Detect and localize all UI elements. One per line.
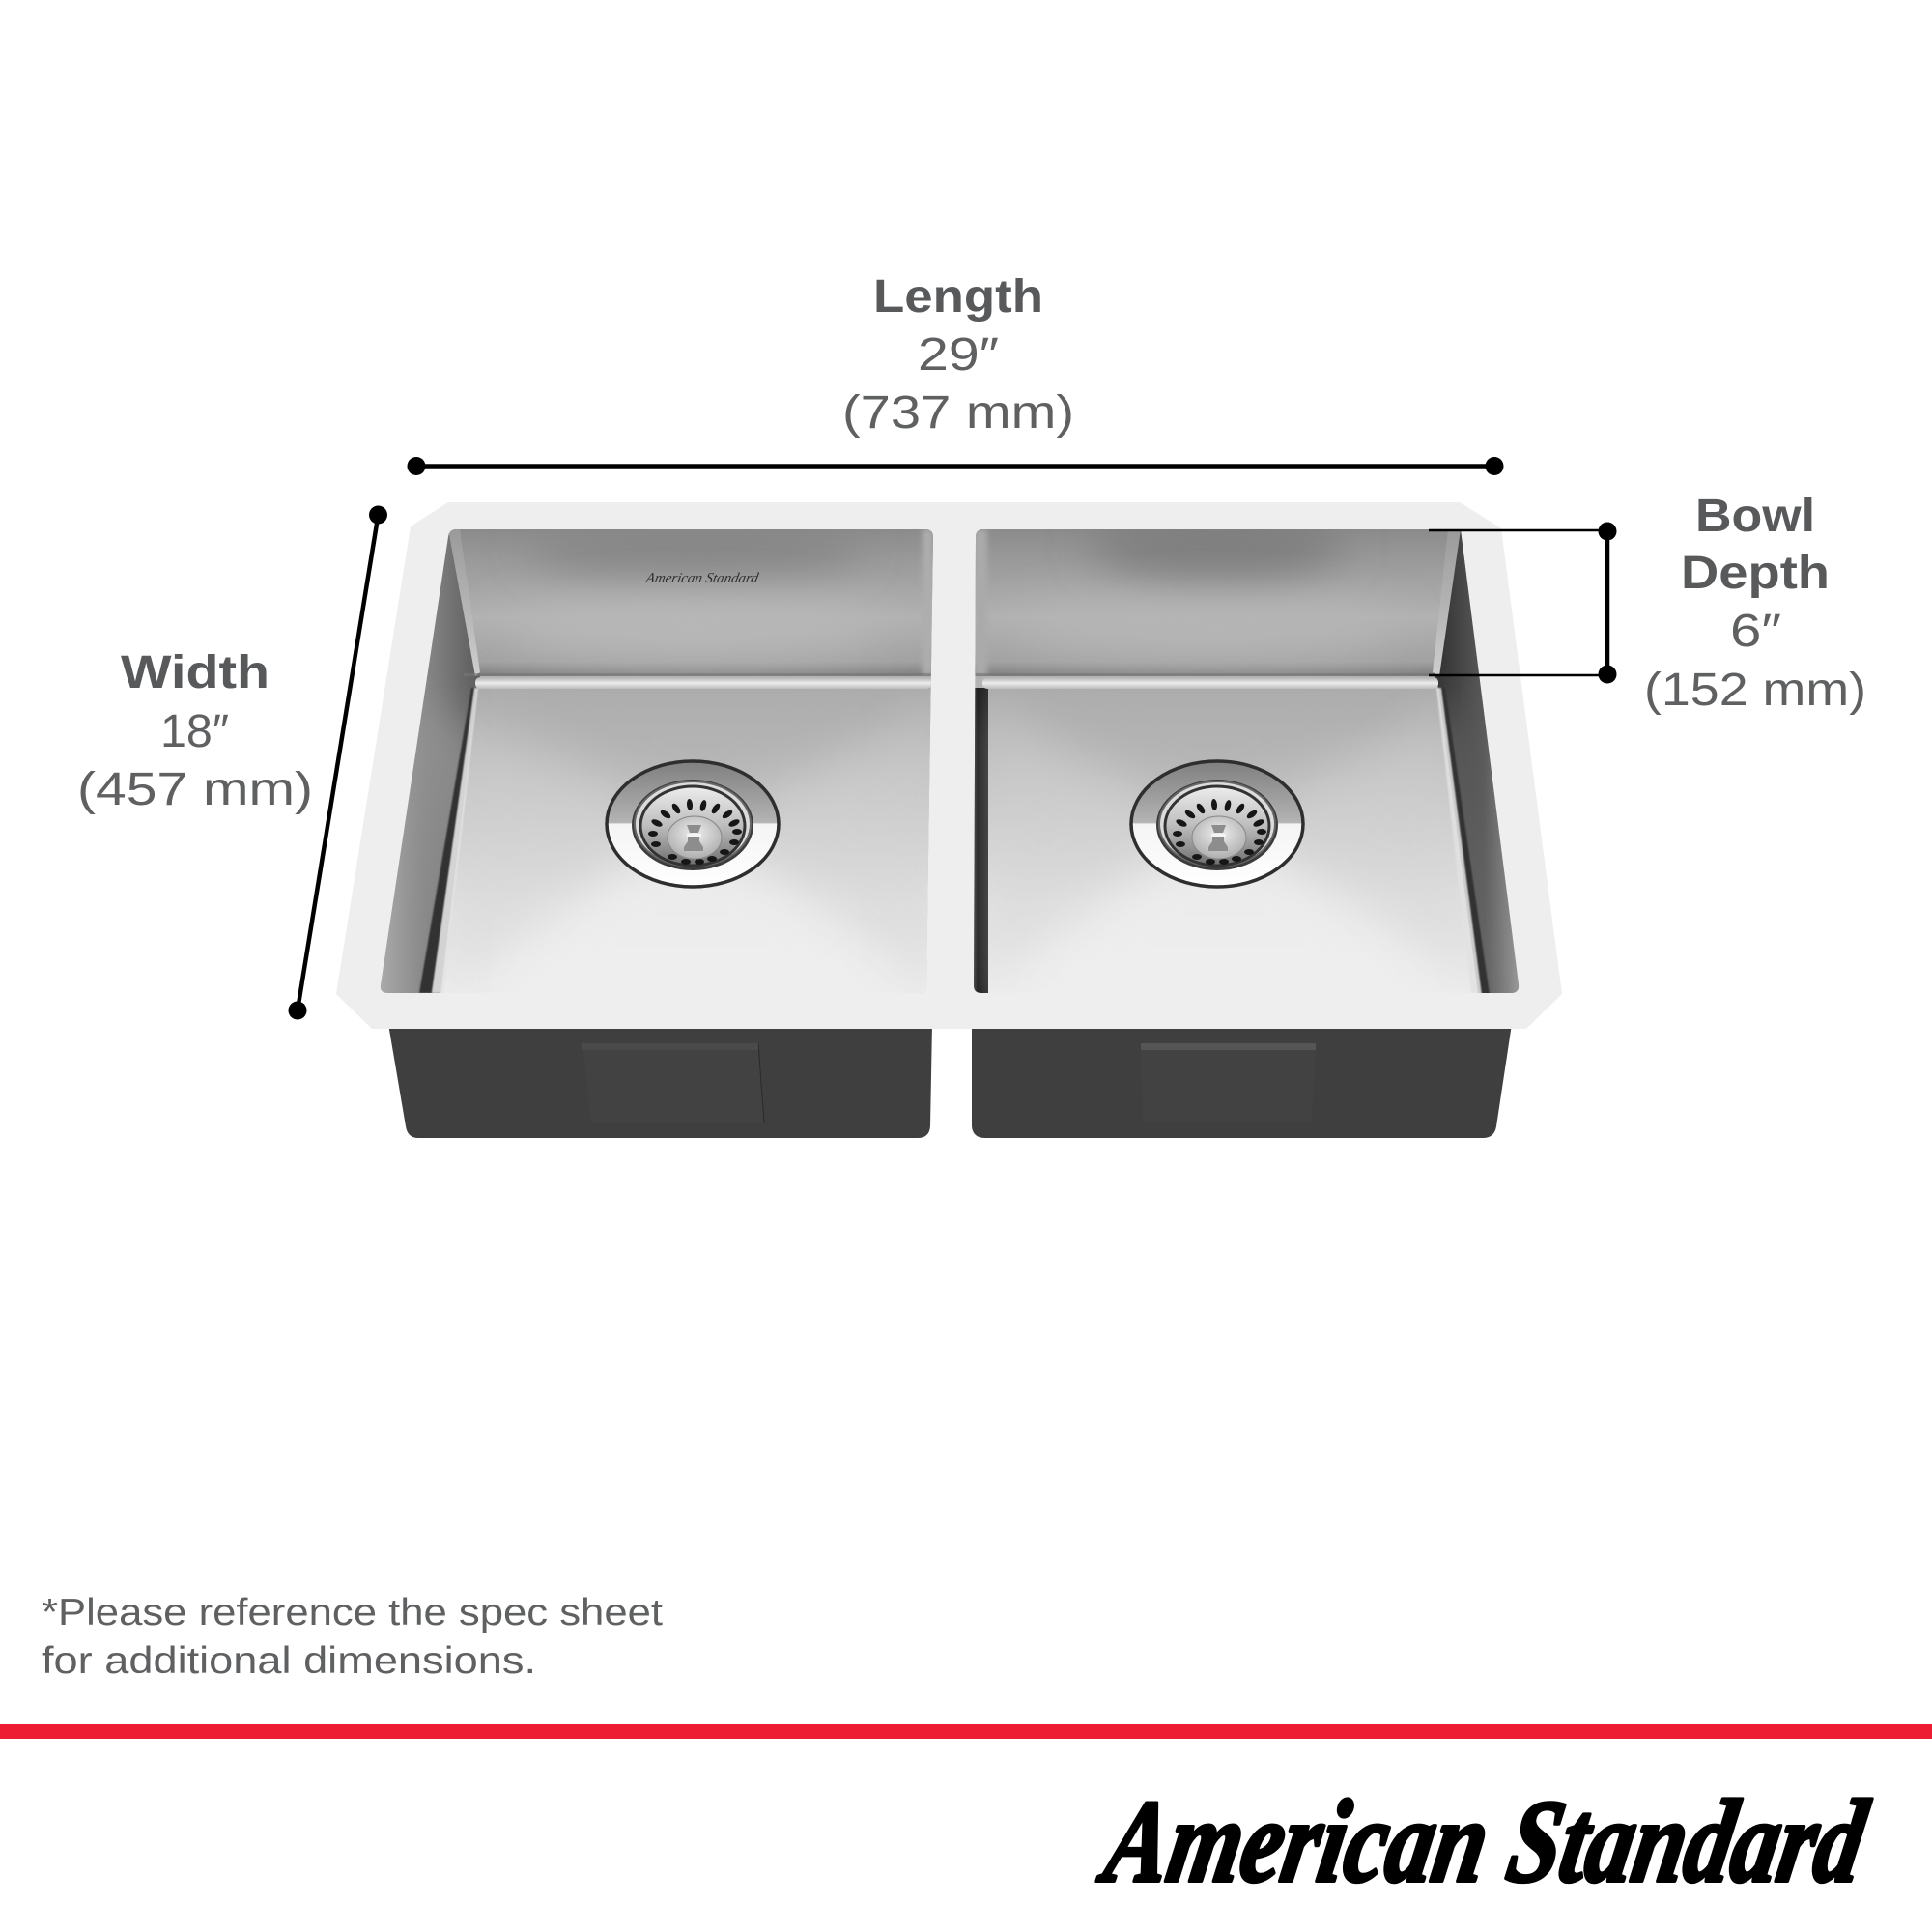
width label: (457 mm)	[77, 764, 313, 815]
left basin underside	[388, 1024, 932, 1138]
right basin underside	[972, 1024, 1512, 1138]
right basin label plate	[1141, 1043, 1316, 1122]
bowl depth label: 6″	[1730, 606, 1781, 657]
back wall	[974, 529, 1466, 676]
length label: (737 mm)	[842, 387, 1074, 439]
floor bevel strip	[1440, 688, 1490, 995]
left wall	[372, 529, 480, 993]
bowl depth dimension line	[1429, 522, 1617, 684]
left drain	[607, 761, 779, 887]
footnote: for additional dimensions.	[42, 1640, 536, 1682]
right wall corner seam	[1433, 529, 1461, 676]
sink rim	[336, 502, 1562, 1029]
right drain	[1131, 761, 1303, 887]
floor	[988, 748, 1472, 993]
length dimension line	[408, 457, 1503, 475]
front lip highlight	[982, 677, 1438, 689]
width label	[77, 647, 313, 815]
footnote	[42, 1592, 663, 1682]
width label: Width	[121, 647, 270, 698]
right bowl	[974, 529, 1519, 993]
length label: 29″	[918, 329, 999, 381]
floor bevel strip	[419, 688, 475, 993]
red divider bar	[0, 1724, 1932, 1739]
left bevel shadow	[974, 688, 988, 993]
sink illustration	[336, 497, 1562, 1138]
bowl depth label	[1644, 491, 1866, 716]
bowl depth label: (152 mm)	[1644, 665, 1866, 716]
engraved logo: American Standard	[643, 570, 760, 586]
left bowl	[372, 512, 942, 1005]
width dimension line	[288, 506, 387, 1020]
back wall	[454, 529, 937, 676]
length label: Length	[873, 271, 1043, 323]
bowl depth label: Depth	[1681, 548, 1830, 599]
left wall corner seam	[448, 529, 480, 676]
length label	[842, 271, 1074, 439]
floor	[440, 688, 933, 995]
footnote: *Please reference the spec sheet	[42, 1592, 663, 1634]
width label: 18″	[160, 706, 229, 757]
left basin label plate	[582, 1043, 764, 1123]
right wall	[1434, 529, 1526, 995]
front lip highlight	[475, 677, 931, 689]
bowl depth label: Bowl	[1695, 491, 1815, 542]
